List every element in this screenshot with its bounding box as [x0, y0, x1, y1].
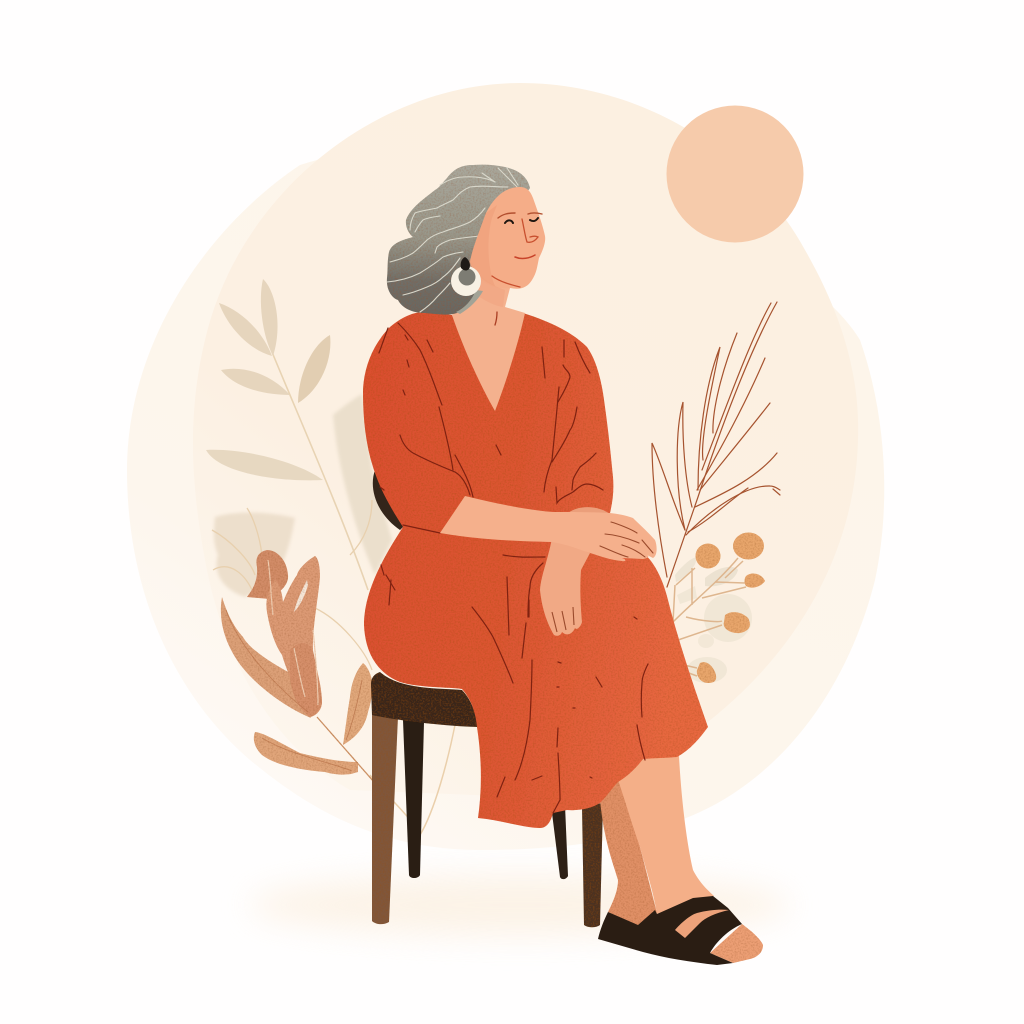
chair front left leg — [372, 712, 398, 924]
right plant — [652, 302, 780, 683]
finger lines lower hand — [552, 607, 574, 632]
ground shadow — [250, 875, 790, 935]
legs and feet — [598, 735, 763, 965]
face side shading — [470, 205, 497, 286]
beige paint patch behind flower — [214, 513, 295, 597]
leaf highlight — [294, 580, 308, 612]
left pale foliage — [206, 279, 455, 835]
pale stem — [272, 352, 368, 590]
dress body — [363, 312, 708, 828]
leaf far left — [221, 597, 311, 718]
wrist behind forearm — [568, 507, 610, 514]
chair back left leg — [403, 720, 424, 878]
pale background blob — [127, 148, 884, 850]
hair behind neck — [456, 290, 483, 314]
orange flower heads — [696, 532, 765, 683]
thin curved stems — [212, 500, 372, 670]
palm fronds — [652, 302, 780, 587]
chair back right leg — [551, 805, 568, 879]
sun circle — [666, 106, 804, 242]
neck and chest — [452, 240, 525, 411]
hair — [387, 165, 530, 315]
leaf central — [266, 556, 322, 717]
toes — [710, 924, 763, 963]
leaf central darker base — [290, 643, 322, 717]
upper arm and hand — [440, 496, 657, 561]
left terracotta leaves — [221, 550, 374, 782]
pale flower shadows — [675, 558, 752, 683]
beige paint patch behind chair — [333, 394, 392, 575]
chair — [371, 470, 603, 927]
skin between straps — [675, 910, 729, 938]
dress — [363, 312, 708, 828]
chair back — [373, 470, 408, 530]
face — [470, 187, 545, 289]
chair front right leg — [582, 803, 603, 927]
pale leaves — [206, 279, 330, 480]
leaf stem — [317, 717, 374, 782]
woman head and arms — [387, 165, 657, 636]
chair seat — [371, 672, 478, 727]
hair strands — [387, 168, 518, 312]
facial features — [492, 213, 542, 325]
dress creases — [379, 323, 648, 813]
front leg — [618, 735, 714, 914]
sandal — [598, 896, 742, 965]
main background circle — [193, 83, 858, 800]
back leg — [600, 778, 657, 926]
leaf right of stem — [343, 663, 372, 745]
neck shadow — [465, 258, 505, 307]
leaf top dark — [247, 550, 288, 599]
finger lines upper hand — [600, 522, 653, 557]
flower stems — [673, 558, 746, 676]
lower stem — [370, 725, 455, 835]
earring — [451, 257, 481, 296]
leaf bottom — [254, 732, 358, 775]
leaf veins — [226, 610, 362, 771]
lower arm and hand — [540, 538, 590, 636]
